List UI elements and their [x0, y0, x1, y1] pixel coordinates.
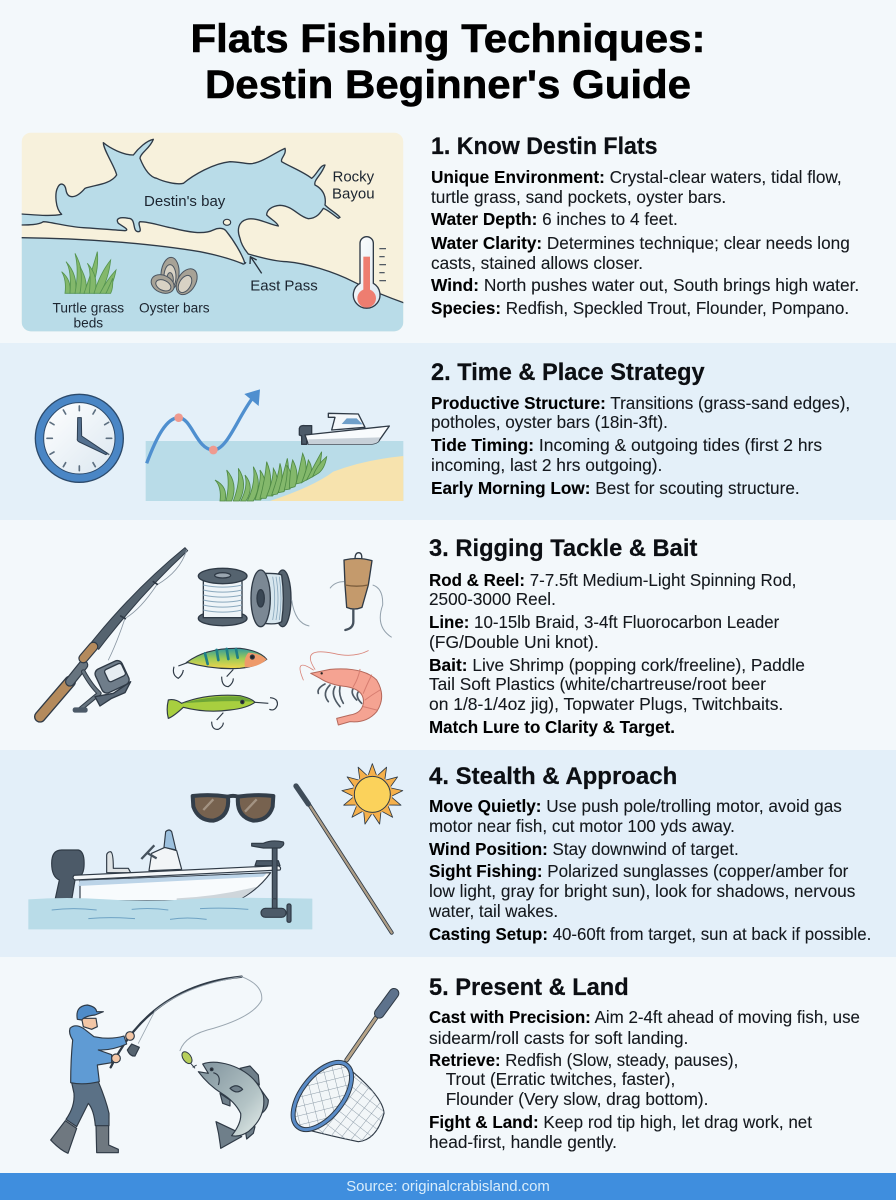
text block: section 5: Trout (Erratic twitches, faster), — [446, 1069, 675, 1089]
footer source bar: Source: originalcrabisland.com — [346, 1179, 550, 1195]
heading: 3. Rigging Tackle & Bait — [429, 535, 697, 562]
icon: sun — [341, 764, 403, 825]
text block: section 3: Tail Soft Plastics (white/chartreuse/root beer — [429, 674, 766, 694]
text block: section 3: Bait: Live Shrimp (popping cork/freeline), Paddle — [429, 654, 805, 674]
icon: landing net — [282, 993, 394, 1142]
text block: section 3: Match Lure to Clarity & Target. — [429, 717, 675, 737]
text block: section 3 — [429, 535, 805, 737]
panel: 4. Stealth & Approach — [0, 750, 896, 957]
icon: soft plastic lure — [167, 695, 277, 729]
text block: section 4: Casting Setup: 40-60ft from target, sun at back if possible. — [429, 924, 871, 944]
text block: section 5 — [429, 974, 860, 1152]
text block: section 4: Move Quietly: Use push pole/trolling motor, avoid gas — [429, 796, 842, 816]
text block: section 2: Early Morning Low: Best for scouting structure. — [431, 478, 800, 498]
icon: shrimp — [300, 651, 382, 725]
text block: section 2: incoming, last 2 hrs outgoing). — [431, 455, 662, 475]
map labels — [53, 168, 375, 330]
title — [191, 16, 705, 107]
text block: section 1: Unique Environment: Crystal-clear waters, tidal flow, — [431, 167, 842, 187]
map labels: Oyster bars — [139, 300, 210, 315]
illustration: tide and boat — [34, 389, 404, 502]
title: Flats Fishing Techniques: — [191, 16, 705, 60]
text block: section 5: Retrieve: Redfish (Slow, steady, pauses), — [429, 1050, 738, 1070]
text block: section 3: on 1/8-1/4oz jig), Topwater Plugs, Twitchbaits. — [429, 694, 783, 714]
text block: section 1: casts, stained allows closer. — [431, 253, 643, 273]
heading: 5. Present & Land — [429, 974, 629, 1000]
icon: thermometer — [353, 237, 386, 308]
icon: braid spool — [251, 570, 309, 627]
icon: jumping fish — [198, 1062, 268, 1148]
text block: section 5: Cast with Precision: Aim 2-4ft ahead of moving fish, use — [429, 1007, 860, 1027]
chart: tide curve — [147, 389, 260, 463]
text block: section 4: water, tail wakes. — [429, 901, 558, 921]
illustration: angler, fish and net — [50, 976, 400, 1154]
panel: 5. Present & Land — [0, 957, 896, 1173]
panel: 3. Rigging Tackle & Bait — [0, 520, 896, 750]
icon: boat with trolling motor — [52, 830, 284, 908]
icon: East Pass arrow — [250, 257, 262, 273]
text block: section 5: head-first, handle gently. — [429, 1132, 617, 1152]
text block: section 2 — [431, 358, 850, 498]
icon: lure on line — [180, 1050, 197, 1068]
map labels: Rocky — [332, 168, 375, 185]
icon: turtle grass — [62, 252, 116, 293]
text block: section 4: motor near fish, cut motor 100 yds away. — [429, 816, 735, 836]
title: Destin Beginner's Guide — [205, 63, 691, 107]
map labels: Bayou — [332, 185, 375, 202]
text block: section 3: Line: 10-15lb Braid, 3-4ft Fluorocarbon Leader — [429, 612, 779, 632]
text block: section 2: Productive Structure: Transitions (grass-sand edges), — [431, 393, 850, 413]
icon: push pole — [296, 786, 392, 933]
icon: oysters — [148, 257, 201, 298]
icon: seagrass — [215, 452, 327, 501]
footer source bar — [0, 1173, 896, 1200]
icon: boat — [299, 413, 389, 444]
text block: section 2: Tide Timing: Incoming & outgoing tides (first 2 hrs — [431, 435, 822, 455]
text block: section 1: Water Depth: 6 inches to 4 feet. — [431, 209, 678, 229]
illustration: tackle — [34, 547, 392, 730]
map labels: East Pass — [250, 278, 318, 295]
text block: section 4 — [428, 762, 871, 944]
panel: 1. Know Destin Flats — [22, 132, 858, 332]
heading: 2. Time & Place Strategy — [431, 358, 705, 386]
heading: 1. Know Destin Flats — [431, 133, 657, 160]
icon: line spool — [198, 568, 247, 626]
text block: section 5: Flounder (Very slow, drag bottom). — [446, 1089, 708, 1109]
text block: section 4: Sight Fishing: Polarized sunglasses (copper/amber for — [429, 861, 848, 881]
icon: hard lure — [173, 648, 267, 687]
text block: section 4: low light, gray for bright sun), look for shadows, nervous — [429, 881, 855, 901]
text block: section 3: 2500-3000 Reel. — [429, 589, 556, 609]
text block: section 3: (FG/Double Uni knot). — [429, 632, 599, 652]
water and sand — [146, 441, 403, 501]
icon: clock — [35, 394, 123, 482]
text block: section 1: turtle grass, sand pockets, oyster bars. — [431, 187, 726, 207]
text block: section 1: Species: Redfish, Speckled Trout, Flounder, Pompano. — [431, 298, 849, 318]
text block: section 2: potholes, oyster bars (18in-3ft). — [431, 412, 668, 432]
text block: section 5: Fight & Land: Keep rod tip high, let drag work, net — [429, 1112, 812, 1132]
heading: 4. Stealth & Approach — [429, 762, 677, 790]
illustration: stealth boat — [28, 763, 404, 935]
text block: section 1 — [431, 133, 859, 318]
text block: section 5: sidearm/roll casts for soft landing. — [429, 1028, 688, 1048]
icon: angler — [51, 977, 262, 1153]
text block: section 4: Wind Position: Stay downwind of target. — [429, 838, 739, 858]
text block: section 1: Water Clarity: Determines technique; clear needs long — [431, 233, 850, 253]
panel: 2. Time & Place Strategy — [0, 343, 896, 520]
map labels: beds — [74, 315, 103, 330]
icon: popping cork — [330, 553, 392, 637]
map labels: Destin's bay — [144, 193, 226, 210]
text block: section 1: Wind: North pushes water out, South brings high water. — [431, 275, 859, 295]
map labels: Turtle grass — [53, 300, 124, 315]
text block: section 3: Rod & Reel: 7-7.5ft Medium-Light Spinning Rod, — [429, 570, 796, 590]
map illustration — [22, 132, 404, 332]
icon: rod and reel — [40, 548, 188, 717]
water — [28, 898, 312, 929]
icon: sunglasses — [193, 795, 273, 821]
